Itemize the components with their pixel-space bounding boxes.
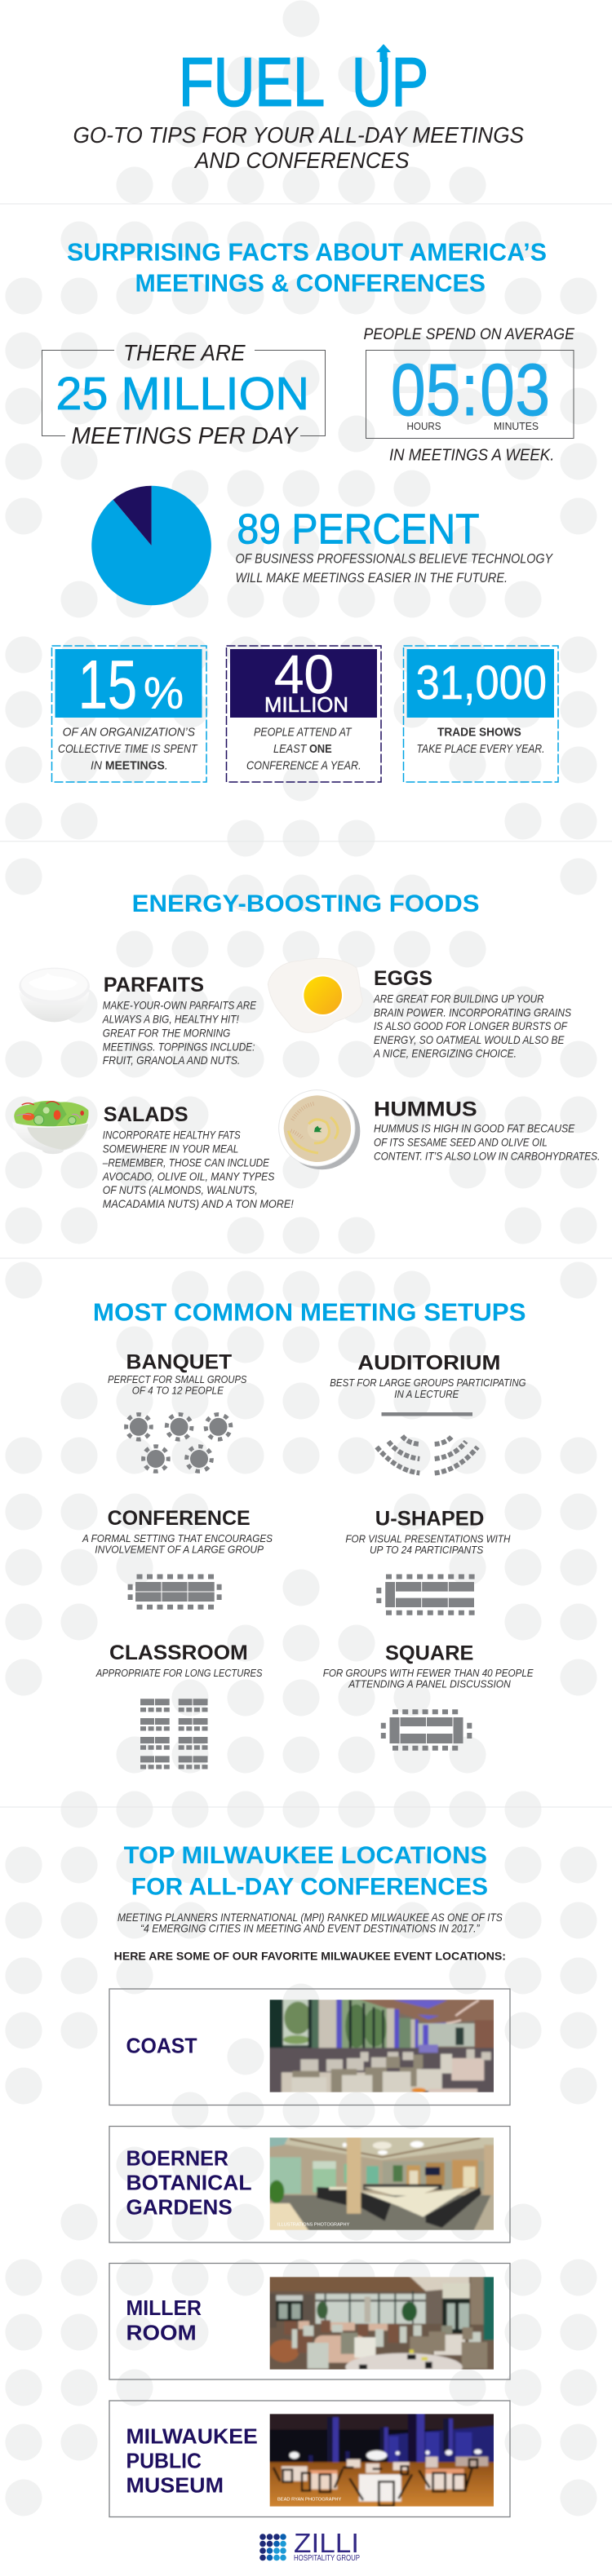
panel: 25 million meetings xyxy=(42,340,325,449)
panel: milwaukee public museum xyxy=(109,2401,510,2516)
heading: surprising facts xyxy=(67,238,547,297)
diagram: u-shaped tables xyxy=(379,1577,476,1613)
text: eggs: BRAIN POWER. INCORPORATING GRAINS xyxy=(374,1005,572,1018)
text: salads: OF NUTS (ALMONDS, WALNUTS, xyxy=(103,1183,258,1196)
panel: miller room xyxy=(109,2264,510,2381)
setup: classroom: APPROPRIATE FOR LONG LECTURES xyxy=(95,1667,263,1679)
setup: auditorium: IN A LECTURE xyxy=(394,1388,459,1400)
heading: milwaukee locations xyxy=(124,1842,488,1900)
icon: hummus plate xyxy=(279,1090,360,1169)
text: salads: INCORPORATE HEALTHY FATS xyxy=(103,1129,241,1142)
setup: conference: INVOLVEMENT OF A LARGE GROUP xyxy=(95,1543,264,1555)
panel: hours in meetings clock xyxy=(364,325,575,465)
setup: auditorium xyxy=(330,1351,526,1473)
title: FUEL xyxy=(179,43,323,120)
stat: 89 percent: 89 PERCENT xyxy=(237,506,480,554)
card: 15 percent xyxy=(52,646,206,782)
text: intro: “4 EMERGING CITIES IN MEETING AND EVENT DESTINATIONS IN 2017.” xyxy=(140,1922,481,1935)
text: parfaits xyxy=(102,974,257,1067)
setup: u-shaped: FOR VISUAL PRESENTATIONS WITH xyxy=(345,1532,511,1544)
text: parfaits: FRUIT, GRANOLA AND NUTS. xyxy=(103,1054,240,1067)
subtitle xyxy=(73,122,525,173)
logo: zilli hospitality group: HOSPITALITY GROUP xyxy=(294,2554,360,2563)
text: eggs: ARE GREAT FOR BUILDING UP YOUR xyxy=(373,992,543,1005)
text: salads: –REMEMBER, THOSE CAN INCLUDE xyxy=(102,1155,270,1169)
panel: boerner botanical gardens: BOERNER xyxy=(126,2146,228,2171)
card: 40 million: PEOPLE ATTEND AT xyxy=(254,725,353,739)
stat: 89 percent xyxy=(235,506,554,585)
setup: u-shaped: U-SHAPED xyxy=(375,1507,484,1530)
setup: conference xyxy=(82,1507,273,1607)
stat: 89 percent: OF BUSINESS PROFESSIONALS BELIEVE TECHNOLOGY xyxy=(235,551,554,567)
text: hummus: HUMMUS IS HIGH IN GOOD FAT BECAUSE xyxy=(374,1121,575,1134)
text: parfaits: MAKE-YOUR-OWN PARFAITS ARE xyxy=(103,999,257,1012)
text: favorites lead-in: HERE ARE SOME OF OUR FAVORITE MILWAUKEE EVENT LOCATIONS: xyxy=(114,1950,506,1963)
card: 15 percent: IN MEETINGS. xyxy=(91,758,168,772)
setup: u-shaped: UP TO 24 PARTICIPANTS xyxy=(370,1544,484,1556)
panel: coast xyxy=(109,1989,510,2105)
text: salads: MACADAMIA NUTS) AND A TON MORE! xyxy=(103,1197,294,1210)
icon: arrow on the U xyxy=(376,44,391,62)
clock digits: 05:03 xyxy=(391,348,550,431)
text: salads: SALADS xyxy=(104,1103,188,1126)
photo: coast xyxy=(269,1999,494,2092)
setup: banquet xyxy=(108,1350,247,1471)
card: 15 percent: COLLECTIVE TIME IS SPENT xyxy=(58,742,198,756)
logo: zilli hospitality group: ZILLI xyxy=(294,2528,359,2558)
title xyxy=(179,43,428,120)
setup: classroom xyxy=(95,1641,263,1767)
card: 31,000: TRADE SHOWS xyxy=(437,725,521,739)
text: salads: SOMEWHERE IN YOUR MEAL xyxy=(103,1142,238,1155)
text: parfaits: GREAT FOR THE MORNING xyxy=(103,1026,230,1039)
setup: auditorium: AUDITORIUM xyxy=(357,1351,500,1374)
setup: conference: CONFERENCE xyxy=(108,1507,251,1530)
setup: classroom: CLASSROOM xyxy=(109,1641,248,1664)
panel: hours in meetings clock: MINUTES xyxy=(494,421,539,432)
card: 40 million: CONFERENCE A YEAR. xyxy=(246,758,361,772)
heading: surprising facts: SURPRISING FACTS ABOUT AMERICA’S xyxy=(67,238,547,266)
panel: hours in meetings clock: HOURS xyxy=(406,421,441,432)
card: 15 percent: OF AN ORGANIZATION’S xyxy=(63,725,195,739)
panel: boerner botanical gardens: BOTANICAL xyxy=(126,2170,252,2194)
text: eggs: ENERGY, SO OATMEAL WOULD ALSO BE xyxy=(374,1033,565,1046)
panel: 25 million meetings: MEETINGS PER DAY xyxy=(72,423,299,449)
pie chart: 89 percent xyxy=(91,486,211,605)
card: 40 million xyxy=(227,644,381,782)
card: 31,000: TAKE PLACE EVERY YEAR. xyxy=(416,742,545,756)
icon: parfait bowl xyxy=(19,968,90,1022)
panel: miller room: ROOM xyxy=(126,2320,197,2344)
panel: boerner botanical gardens xyxy=(109,2127,510,2242)
icon: fried egg xyxy=(268,958,362,1032)
logo: zilli hospitality group xyxy=(259,2528,360,2563)
panel: coast: COAST xyxy=(126,2034,197,2058)
photo: boerner xyxy=(269,2137,494,2230)
panel: milwaukee public museum: PUBLIC xyxy=(126,2449,202,2473)
heading: milwaukee locations: FOR ALL-DAY CONFERENCES xyxy=(131,1873,488,1900)
text: intro xyxy=(118,1911,503,1935)
subtitle: AND CONFERENCES xyxy=(193,148,410,173)
panel: milwaukee public museum: MUSEUM xyxy=(126,2473,224,2498)
card: 31,000: 31,000 xyxy=(416,656,547,709)
panel: milwaukee public museum: MILWAUKEE xyxy=(126,2424,258,2449)
photo: museum xyxy=(269,2414,494,2507)
heading: milwaukee locations: TOP MILWAUKEE LOCATIONS xyxy=(124,1842,487,1869)
panel: hours in meetings clock: PEOPLE SPEND ON AVERAGE xyxy=(364,325,575,343)
setup: square: FOR GROUPS WITH FEWER THAN 40 PEOPLE xyxy=(323,1667,534,1679)
photo: miller room xyxy=(269,2277,494,2370)
text: parfaits: MEETINGS. TOPPINGS INCLUDE: xyxy=(103,1040,255,1053)
text: parfaits: PARFAITS xyxy=(104,974,204,996)
stat: 89 percent: WILL MAKE MEETINGS EASIER IN THE FUTURE. xyxy=(235,570,508,585)
panel: 25 million meetings: 25 MILLION xyxy=(55,368,309,420)
card: 40 million: 40 xyxy=(274,644,334,705)
text: eggs xyxy=(373,967,572,1060)
text: eggs: IS ALSO GOOD FOR LONGER BURSTS OF xyxy=(374,1019,568,1032)
setup: u-shaped xyxy=(345,1507,511,1613)
panel: hours in meetings clock: IN MEETINGS A WEEK. xyxy=(389,447,554,465)
title: UP xyxy=(352,43,428,120)
setup: banquet: OF 4 TO 12 PEOPLE xyxy=(132,1385,224,1397)
text: salads xyxy=(102,1103,294,1210)
heading: meeting setups: MOST COMMON MEETING SETUPS xyxy=(93,1298,526,1326)
photo: boerner: ILLUSTRATIONS PHOTOGRAPHY xyxy=(277,2223,350,2228)
diagram: square tables xyxy=(384,1712,469,1748)
setup: banquet: PERFECT FOR SMALL GROUPS xyxy=(108,1373,247,1385)
setup: square: ATTENDING A PANEL DISCUSSION xyxy=(348,1678,511,1690)
diagram: conference table xyxy=(131,1577,220,1607)
card: 40 million: MILLION xyxy=(264,692,348,717)
setup: auditorium: BEST FOR LARGE GROUPS PARTICIPATING xyxy=(330,1376,526,1389)
panel: miller room: MILLER xyxy=(126,2295,202,2320)
photo: museum: BEAD RYAN PHOTOGRAPHY xyxy=(277,2498,342,2503)
text: eggs: A NICE, ENERGIZING CHOICE. xyxy=(373,1047,517,1060)
text: parfaits: ALWAYS A BIG, HEALTHY HIT! xyxy=(102,1013,239,1026)
text: intro: MEETING PLANNERS INTERNATIONAL (MPI) RANKED MILWAUKEE AS ONE OF ITS xyxy=(118,1911,503,1924)
diagram: banquet tables xyxy=(126,1414,231,1471)
panel: boerner botanical gardens: GARDENS xyxy=(126,2195,233,2220)
card: 31,000 xyxy=(403,646,558,782)
text: salads: AVOCADO, OLIVE OIL, MANY TYPES xyxy=(102,1169,275,1182)
text: hummus xyxy=(374,1098,600,1162)
heading: energy-boosting foods: ENERGY-BOOSTING FOODS xyxy=(132,890,480,917)
setup: conference: A FORMAL SETTING THAT ENCOURAGES xyxy=(82,1532,273,1544)
card: 15 percent: % xyxy=(144,668,184,718)
heading: surprising facts: MEETINGS & CONFERENCES xyxy=(135,269,486,297)
text: hummus: OF ITS SESAME SEED AND OLIVE OIL xyxy=(374,1136,548,1149)
setup: square xyxy=(323,1642,534,1748)
icon: salad bowl xyxy=(12,1101,90,1154)
icon: logo dots xyxy=(259,2534,286,2561)
card: 40 million: LEAST ONE xyxy=(273,742,332,756)
diagram: classroom tables xyxy=(140,1699,208,1767)
setup: square: SQUARE xyxy=(385,1642,473,1665)
setup: banquet: BANQUET xyxy=(126,1350,232,1373)
text: hummus: HUMMUS xyxy=(374,1098,477,1120)
subtitle: GO-TO TIPS FOR YOUR ALL-DAY MEETINGS xyxy=(73,122,525,148)
card: 15 percent: 15 xyxy=(78,647,137,723)
panel: 25 million meetings: THERE ARE xyxy=(123,340,246,365)
text: eggs: EGGS xyxy=(374,967,432,990)
diagram: auditorium seating xyxy=(377,1412,477,1473)
